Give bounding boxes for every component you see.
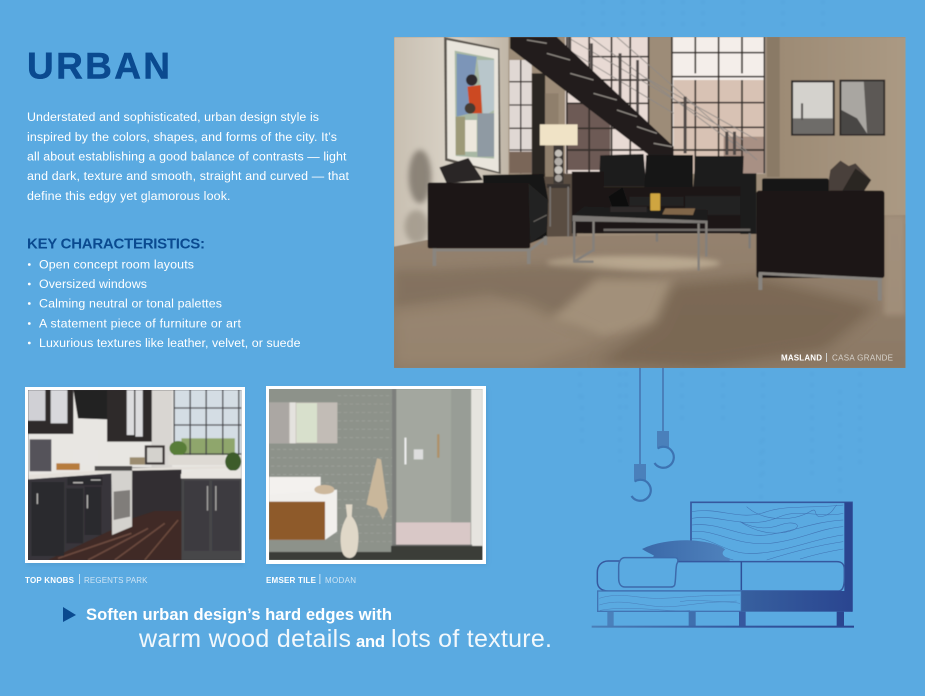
counter items <box>30 439 51 471</box>
heading: key characteristics: KEY CHARACTERISTICS: <box>27 236 205 252</box>
photo credit: masland: MASLAND <box>781 354 822 362</box>
pendant lights illustration <box>632 368 674 501</box>
caption: emser tile: EMSER TILE <box>266 576 317 585</box>
framed photos <box>791 80 835 136</box>
intro text block <box>27 110 350 203</box>
caption: top knobs: REGENTS PARK <box>84 576 148 585</box>
tagline: and <box>356 632 385 651</box>
floor <box>48 507 185 560</box>
mattress <box>597 561 844 591</box>
black sofa <box>599 154 646 187</box>
tile wall <box>269 389 482 553</box>
caption: top knobs: TOP KNOBS <box>25 576 75 585</box>
caption: top knobs <box>25 574 148 585</box>
main photo: living room <box>394 37 907 368</box>
laptop, mug, book on table <box>609 187 630 208</box>
caption: emser tile: MODAN <box>325 576 356 585</box>
mid cabinets <box>132 467 181 518</box>
tagline: warm wood details <box>138 625 351 653</box>
bed legs and floor <box>607 612 614 626</box>
wall shadow <box>409 150 431 203</box>
list: key characteristics: A statement piece of furniture or art <box>39 316 242 330</box>
intro text block: all about establishing a good balance of contrasts — light <box>27 150 347 164</box>
shower floor <box>396 522 470 545</box>
folded blanket <box>619 558 678 587</box>
left narrow window <box>509 60 532 173</box>
window <box>173 390 242 455</box>
kitchen wall <box>28 390 242 480</box>
vase <box>341 504 358 558</box>
list: key characteristics: Luxurious textures like leather, velvet, or suede <box>39 336 301 350</box>
list: key characteristics: Open concept room layouts <box>39 258 194 272</box>
intro text block: and dark, texture and smooth, straight and curved — that <box>27 169 350 183</box>
vanity <box>269 477 321 497</box>
towel <box>366 458 388 520</box>
back walls <box>394 37 511 257</box>
floor <box>269 552 482 560</box>
dark column <box>532 73 545 177</box>
carpet <box>394 215 906 368</box>
kitchen photo <box>25 387 245 565</box>
island <box>181 478 242 560</box>
photo credit: masland <box>781 353 893 362</box>
bed illustration <box>592 502 854 628</box>
intro text block: inspired by the colors, shapes, and forms of the city. It’s <box>27 130 337 144</box>
tagline: lots of texture. <box>391 625 552 653</box>
counter <box>28 466 228 479</box>
coffee table <box>573 207 708 221</box>
bathroom photo <box>266 386 487 565</box>
right sofa <box>827 161 871 194</box>
pillow <box>642 540 730 562</box>
carpet light and shadow <box>547 256 720 271</box>
list: key characteristics: Calming neutral or tonal palettes <box>39 296 222 310</box>
headboard <box>691 502 852 612</box>
shower door frame <box>392 389 396 545</box>
list: key characteristics <box>28 258 301 350</box>
left armchair <box>439 158 483 183</box>
stair railing <box>547 37 757 160</box>
tagline: Soften urban design’s hard edges with <box>86 605 392 624</box>
large windows <box>565 37 649 174</box>
poster <box>444 37 501 174</box>
arrow icon <box>63 607 76 622</box>
caption: emser tile <box>266 574 356 585</box>
bed base <box>598 591 741 611</box>
list: key characteristics: Oversized windows <box>39 277 147 291</box>
photo credit: masland: CASA GRANDE <box>832 354 893 362</box>
black staircase <box>510 37 674 156</box>
intro text block: Understated and sophisticated, urban design style is <box>27 110 319 124</box>
upper cabinets <box>28 390 73 434</box>
title: URBAN <box>27 46 170 86</box>
lower cabinets <box>28 473 111 560</box>
mirror <box>269 402 337 443</box>
stove <box>111 470 132 535</box>
intro text block: define this edgy yet glamorous look. <box>27 189 230 203</box>
tagline <box>86 605 552 653</box>
lamp and side table <box>547 184 570 188</box>
